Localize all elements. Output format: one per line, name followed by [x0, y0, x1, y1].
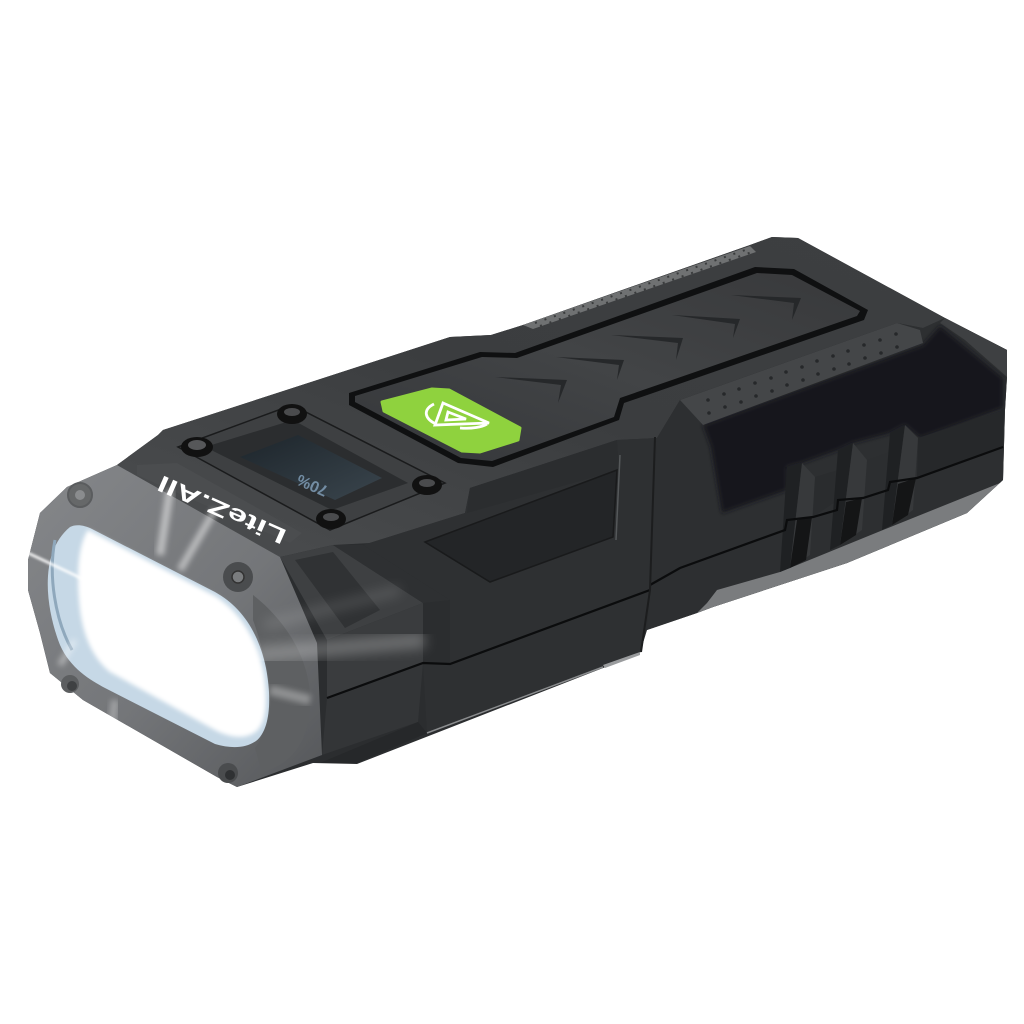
rear vertical ribs	[780, 425, 918, 572]
lens ring	[48, 525, 269, 747]
housing seam lines	[327, 447, 1003, 698]
top control panel recess	[349, 267, 868, 467]
grey lower facet of rear block	[697, 480, 1003, 613]
block divider edge	[641, 437, 655, 652]
chevron ridges on panel	[495, 295, 801, 403]
display module screws	[181, 404, 442, 529]
top face of the housing	[117, 237, 945, 557]
front chamfer facet	[280, 545, 450, 640]
brand plate	[137, 463, 302, 549]
grey dotted grip strip on top edge	[523, 246, 756, 329]
display screen	[240, 435, 382, 500]
recessed side panel	[425, 440, 620, 582]
front bezel face	[28, 465, 322, 787]
LED light glow	[78, 530, 266, 737]
screen readout: 70%	[294, 470, 331, 499]
display module frame	[178, 405, 445, 530]
top control panel plate	[355, 273, 860, 461]
silver underside strip of front block	[427, 652, 640, 733]
rear grip block	[647, 318, 1007, 630]
icon: white triangle logo on button	[426, 403, 489, 428]
lens side ring	[253, 595, 310, 772]
product illustration: flashlight	[28, 237, 1007, 787]
bezel screws	[61, 483, 253, 783]
front housing block side	[320, 438, 657, 763]
brand text: LiteZ.All	[154, 470, 290, 549]
flashlight body silhouette	[28, 237, 1007, 787]
light flare rays	[28, 490, 425, 740]
dotted rubber grip band	[680, 323, 923, 425]
green power button	[382, 389, 520, 452]
